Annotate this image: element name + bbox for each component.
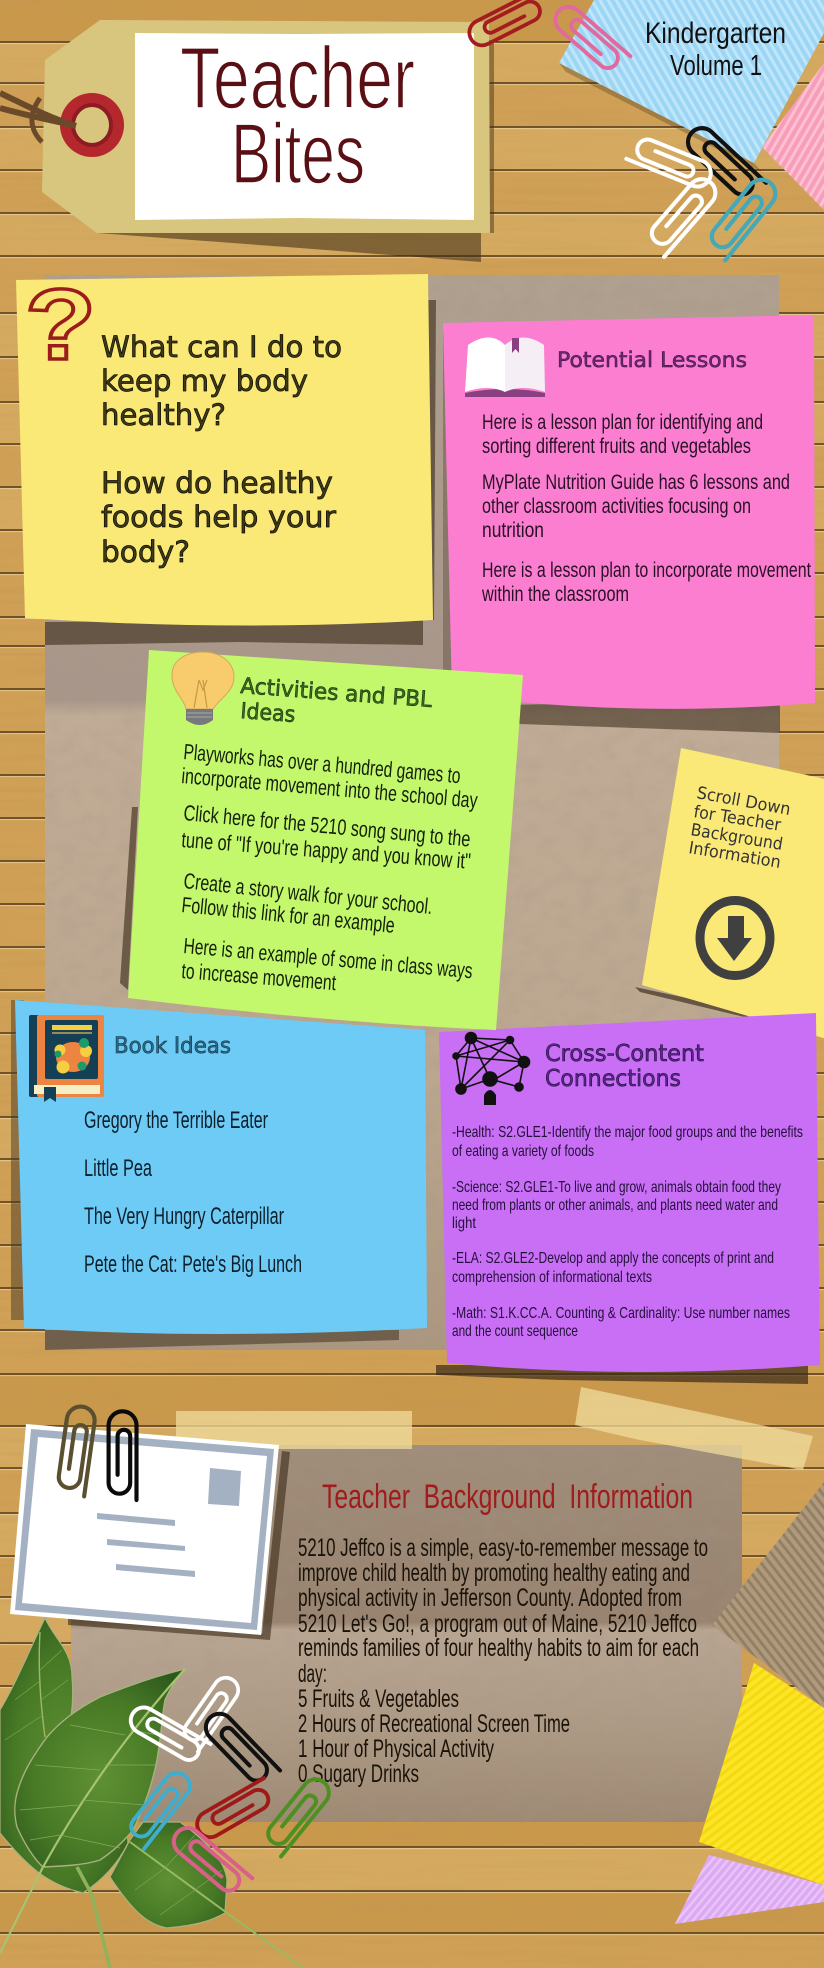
book list: Pete the Cat: Pete's Big Lunch [84,1251,302,1278]
activities list: Playworks has over a hundred games to [183,739,462,788]
icon: picture book [29,1015,104,1102]
lesson list: within the classroom [481,583,629,606]
question text: How do healthy [101,466,333,500]
activities list: to increase movement [181,958,337,995]
kraft paper board [45,275,779,1350]
activities list: tune of "If you're happy and you know it" [181,827,472,874]
title text [180,30,415,202]
activities list [181,739,479,995]
corner corrugated papers [675,1482,824,1924]
panel: scroll down note [635,748,824,1040]
scroll text: for Teacher [692,802,782,836]
standards list [452,1124,803,1340]
book list: The Very Hungry Caterpillar [84,1203,284,1230]
volume label: Volume 1 [670,50,762,82]
panel: essential questions note [16,269,436,645]
paper clips on postcard [56,1405,136,1500]
book list [84,1107,302,1278]
book list: Little Pea [84,1155,152,1182]
heading: Activities and PBL [240,674,434,713]
question text: body? [101,535,190,569]
heading: Connections [545,1066,681,1092]
question text: healthy? [101,398,226,432]
background paragraph: 1 Hour of Physical Activity [298,1735,494,1763]
standards list: of eating a variety of foods [452,1143,594,1160]
heading [545,1041,704,1092]
title text: Teacher [180,30,415,127]
section heading: Teacher Background Information [322,1478,693,1516]
heading: Ideas [240,699,296,728]
standards list: comprehension of informational texts [452,1269,652,1286]
main leaf [0,1669,185,1968]
heading: Cross-Content [545,1041,704,1067]
scroll text: Background [689,820,784,855]
title text: Bites [231,107,365,202]
lower leaf [110,1822,303,1968]
shipping tag title card [0,20,494,262]
question text: keep my body [101,364,308,398]
postcard with clips [10,1405,290,1640]
question text [101,330,342,569]
background paragraph: 0 Sugary Drinks [298,1760,419,1788]
title card [135,33,474,220]
book list: Gregory the Terrible Eater [84,1107,268,1134]
lesson list: other classroom activities focusing on [482,495,751,518]
icon: open book [465,338,545,397]
scroll text: Information [687,838,782,873]
striped corner papers with kindergarten label [559,0,824,210]
scroll text [687,783,792,873]
panel: potential lessons note [443,315,815,733]
masking tape strips [176,1387,813,1470]
background paragraph [298,1534,708,1788]
icon: question mark: ? [25,269,96,381]
activities list: Here is an example of some in class ways [183,933,474,983]
icon: network [453,1032,530,1105]
heading: Potential Lessons [557,348,747,372]
panel: activities and PBL ideas note [120,650,523,1030]
bottom paper clips [124,1673,334,1899]
activities list: Follow this link for an example [181,892,396,938]
scroll text: Scroll Down [695,783,792,820]
lesson list: nutrition [482,519,544,542]
panel: book ideas note [11,1000,427,1350]
panel: teacher background information [71,1445,742,1822]
standards list: light [452,1215,476,1232]
background paragraph: day: [298,1660,327,1688]
lesson list: sorting different fruits and vegetables [482,435,751,458]
eyelet and string [0,93,124,157]
top paper clips [465,0,781,260]
activities list: incorporate movement into the school day [181,763,479,813]
icon: light bulb [172,652,234,725]
heading: Book Ideas [114,1034,231,1059]
icon: down arrow [700,900,770,976]
question text: foods help your [101,500,336,534]
standards list: and the count sequence [452,1323,578,1340]
leaves [0,1618,303,1968]
activities list: Create a story walk for your school. [182,868,434,919]
activities list: Click here for the 5210 song sung to the [183,800,472,852]
volume label [645,17,786,82]
lesson list [481,411,811,606]
volume label: Kindergarten [645,17,786,50]
background paragraph: 5 Fruits & Vegetables [298,1685,459,1713]
question text: What can I do to [101,330,342,364]
back leaf [0,1618,128,1893]
background paragraph: 2 Hours of Recreational Screen Time [298,1710,570,1738]
panel: cross-content connections note [436,1013,820,1384]
